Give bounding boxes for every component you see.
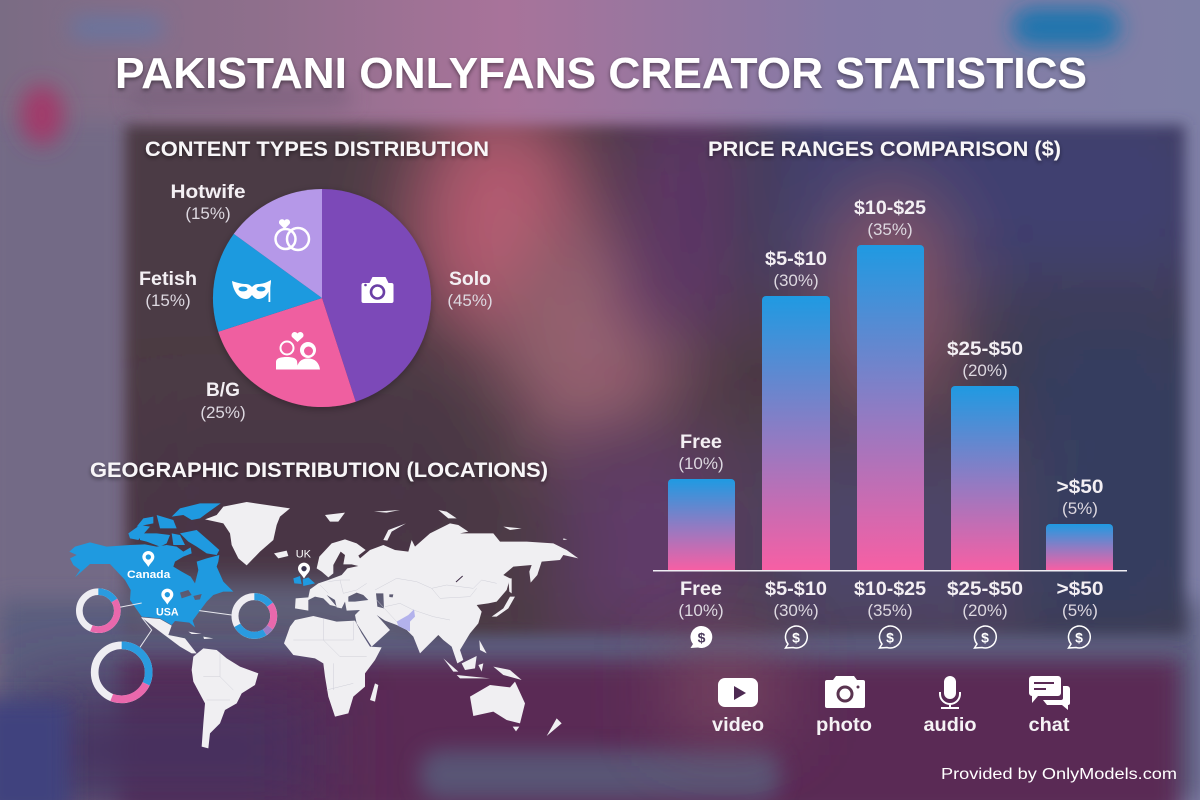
axis label: $25-$50: (20%) <box>962 601 1008 620</box>
icon: mask <box>232 280 271 302</box>
value label: $10-$25: $10-$25 <box>854 198 926 219</box>
icon: photo <box>825 676 865 708</box>
region: North America highlighted <box>69 503 233 627</box>
icon: dollar outline: $ <box>792 630 800 646</box>
region: Africa <box>284 616 382 717</box>
value label: Free: (10%) <box>678 454 724 473</box>
icon: dollar outline <box>879 626 901 648</box>
bar: $5-$10 <box>762 296 830 570</box>
icon: dollar outline <box>1068 626 1090 648</box>
donut: bottom <box>95 645 149 699</box>
pin: Canada <box>142 551 154 567</box>
donut: right <box>235 597 274 635</box>
region: Australia <box>470 682 525 723</box>
slice: solo <box>322 189 431 402</box>
region: Pakistan <box>397 609 415 632</box>
icon: dollar outline <box>785 626 807 648</box>
region: South America <box>192 648 258 748</box>
slice: B/G <box>218 298 356 407</box>
world map <box>69 502 578 748</box>
bar chart: price ranges <box>653 198 1127 648</box>
axis label: $25-$50 <box>947 579 1023 620</box>
value label: Free: Free <box>680 432 722 453</box>
axis label: $5-$10: $5-$10 <box>765 579 827 600</box>
donut: left <box>79 592 117 630</box>
axis label: $10-$25: $10-$25 <box>854 579 926 600</box>
region: New Zealand and Tasmania <box>513 718 562 736</box>
label: B/G <box>200 380 246 422</box>
value label: $25-$50: $25-$50 <box>947 339 1023 360</box>
value label: $10-$25 <box>854 198 926 239</box>
label: Canada: Canada <box>127 569 171 581</box>
heading: price ranges: PRICE RANGES COMPARISON ($) <box>708 138 1061 161</box>
axis label: Free <box>678 579 724 620</box>
region: Madagascar <box>370 683 378 702</box>
icon: couple <box>276 332 320 370</box>
axis label: Free: Free <box>680 579 722 600</box>
icon: audio <box>940 676 960 708</box>
label: solo <box>447 269 493 310</box>
value label: >$50: >$50 <box>1056 477 1104 498</box>
axis label: $25-$50: $25-$50 <box>947 579 1023 600</box>
pie chart: content types <box>139 182 493 422</box>
axis label: >$50: >$50 <box>1056 579 1104 600</box>
value label: >$50 <box>1056 477 1104 518</box>
label: fetish: (15%) <box>145 291 191 310</box>
icon: video <box>718 678 758 707</box>
label: hotwife <box>170 182 246 223</box>
icon: dollar filled <box>690 626 712 648</box>
label: solo: Solo <box>449 269 491 290</box>
icon: chat <box>1029 676 1070 710</box>
region: country borders <box>320 578 497 622</box>
heading: geographic distribution: GEOGRAPHIC DISTRIBUTION (LOCATIONS) <box>90 459 548 482</box>
icon: dollar outline: $ <box>1075 630 1083 646</box>
region: Baikal <box>456 576 463 582</box>
pin: USA <box>161 589 173 605</box>
icon: dollar outline <box>974 626 996 648</box>
axis label: Free: (10%) <box>678 601 724 620</box>
value label: $5-$10: (30%) <box>773 271 819 290</box>
value label: $25-$50 <box>947 339 1023 380</box>
label: hotwife: Hotwife <box>170 182 246 203</box>
value label: $10-$25: (35%) <box>867 220 913 239</box>
value label: >$50: (5%) <box>1062 499 1098 518</box>
label: UK: UK <box>296 549 312 561</box>
label: fetish: Fetish <box>139 269 197 290</box>
bar: Free <box>668 479 735 570</box>
icon: dollar outline: $ <box>886 630 894 646</box>
slice: fetish <box>213 234 322 332</box>
region: UK <box>293 576 315 586</box>
label: hotwife: (15%) <box>185 204 231 223</box>
footer credit: Provided by OnlyModels.com <box>941 766 1177 783</box>
axis label: $5-$10 <box>765 579 827 620</box>
axis label: $10-$25 <box>854 579 926 620</box>
pin: UK <box>298 563 310 579</box>
region: Eurasia <box>295 510 578 663</box>
value label: $5-$10: $5-$10 <box>765 249 827 270</box>
region: country borders <box>203 618 367 700</box>
icon: camera <box>362 277 394 303</box>
label: chat: chat <box>1028 715 1070 736</box>
axis label: >$50 <box>1056 579 1104 620</box>
bar: $25-$50 <box>951 386 1019 570</box>
region: Sakhalin and Japan <box>492 578 515 617</box>
region: arctic islands <box>325 510 567 541</box>
label: audio: audio <box>924 715 976 736</box>
value label: Free <box>678 432 724 473</box>
icon: rings <box>276 219 309 250</box>
title: PAKISTANI ONLYFANS CREATOR STATISTICS <box>115 49 1087 98</box>
label: B/G: (25%) <box>200 403 246 422</box>
heading: content types: CONTENT TYPES DISTRIBUTION <box>145 138 489 161</box>
bar: >$50 <box>1046 524 1113 570</box>
axis label: $5-$10: (30%) <box>773 601 819 620</box>
region: Southeast Asian islands <box>443 640 522 680</box>
label: solo: (45%) <box>447 291 493 310</box>
axis label: $10-$25: (35%) <box>867 601 913 620</box>
label: video: video <box>712 715 764 736</box>
connector lines <box>119 603 232 647</box>
axis label: >$50: (5%) <box>1062 601 1098 620</box>
region: Caribbean islands <box>188 632 213 639</box>
region: Iceland <box>274 551 288 558</box>
icon: dollar filled: $ <box>698 630 706 646</box>
region: Central America <box>142 617 197 653</box>
label: USA: USA <box>156 606 179 618</box>
label: photo: photo <box>816 715 872 736</box>
bar: $10-$25 <box>857 245 924 570</box>
icon: dollar outline: $ <box>981 630 989 646</box>
label: B/G: B/G <box>206 380 240 401</box>
region: Greenland <box>205 502 290 565</box>
value label: $25-$50: (20%) <box>962 361 1008 380</box>
label: fetish <box>139 269 197 310</box>
value label: $5-$10 <box>765 249 827 290</box>
slice: hotwife <box>234 189 322 298</box>
